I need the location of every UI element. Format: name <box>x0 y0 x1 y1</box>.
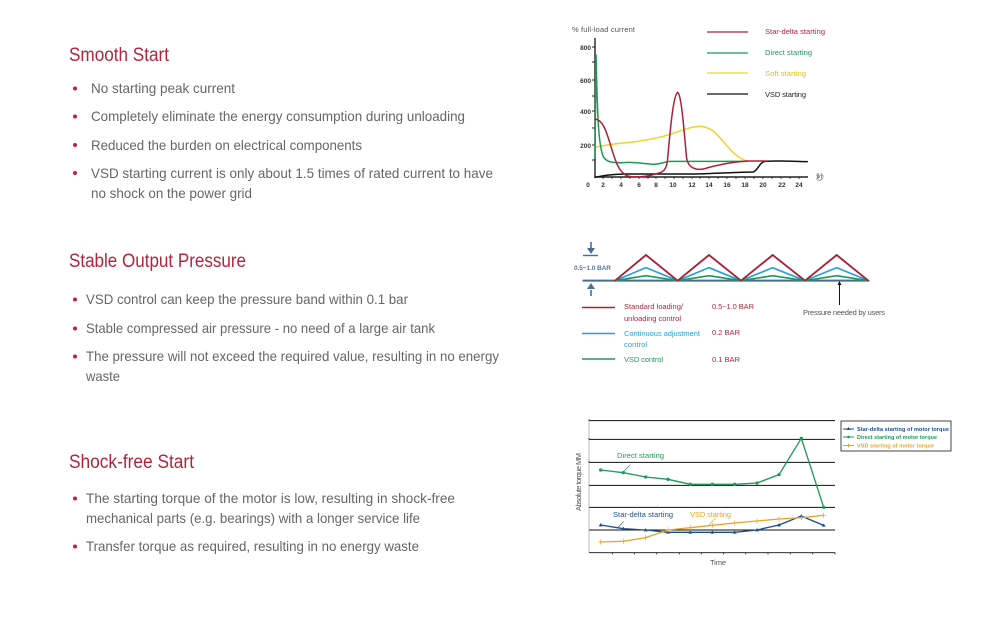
x axis labels: 4 <box>619 182 623 189</box>
y axis labels: 200 <box>580 143 591 150</box>
axis title: percent full-load current: % full-load current <box>572 25 636 34</box>
legend <box>707 27 825 99</box>
axes and ticks <box>592 38 808 179</box>
legend: Direct starting <box>765 48 812 57</box>
bullet list: shock-free start <box>73 490 455 554</box>
heading: stable output pressure: Stable Output Pressure <box>69 251 246 272</box>
legend: standard control <box>582 302 755 323</box>
bullet list: stable output pressure <box>73 291 499 384</box>
x axis labels: 10 <box>669 182 677 189</box>
series lines <box>598 437 826 544</box>
range label: 0.5~1.0 BAR <box>574 265 611 272</box>
x axis labels: 16 <box>723 182 731 189</box>
bullet list: stable output pressure: waste <box>85 368 120 384</box>
legend: standard control: 0.5~1.0 BAR <box>712 302 755 311</box>
x axis unit: 秒 <box>816 172 824 182</box>
x axis labels: 18 <box>741 182 749 189</box>
label: star-delta starting: Star-delta starting <box>613 510 673 519</box>
pressure waves <box>583 255 868 281</box>
bullet list: smooth start: VSD starting current is only about 1.5 times of rated current to have <box>91 165 493 181</box>
heading: smooth start: Smooth Start <box>69 45 170 66</box>
x axis title: Time <box>710 558 726 567</box>
x axis labels: 12 <box>688 182 696 189</box>
x axis labels: 22 <box>778 182 786 189</box>
legend: Star-delta starting <box>765 27 825 36</box>
arrow: band top <box>583 242 598 256</box>
x axis labels: 8 <box>654 182 658 189</box>
bullet list: smooth start: Completely eliminate the energy consumption during unloading <box>91 108 465 124</box>
legend: continuous adjustment <box>582 328 741 349</box>
label: direct starting: Direct starting <box>617 451 664 460</box>
chart: starting current line chart <box>572 25 825 189</box>
bullet list: stable output pressure: VSD control can keep the pressure band within 0.1 bar <box>86 291 408 307</box>
legend: standard control: unloading control <box>624 314 681 323</box>
bullet list: smooth start: No starting peak current <box>91 80 235 96</box>
bullet list: smooth start: Reduced the burden on electrical components <box>91 137 362 153</box>
legend box: Star-delta starting of motor torque <box>857 427 949 433</box>
legend: VSD control: VSD control <box>624 355 663 364</box>
x axis labels: 6 <box>637 182 641 189</box>
bullet list: stable output pressure: Stable compressed air pressure - no need of a large air tank <box>86 320 436 336</box>
panel: shock-free start text <box>69 452 455 554</box>
grid and axes <box>589 419 835 554</box>
bullet list: shock-free start: Transfer torque as required, resulting in no energy waste <box>86 538 419 554</box>
y axis labels: 400 <box>580 109 591 116</box>
legend: VSD starting <box>765 90 806 99</box>
panel: smooth start text <box>69 45 493 201</box>
legend: Soft starting <box>765 69 806 78</box>
heading: shock-free start: Shock-free Start <box>69 452 195 473</box>
curves <box>595 55 807 177</box>
x axis labels: 24 <box>795 182 803 189</box>
legend box: Direct starting of motor torque <box>857 435 937 441</box>
legend box <box>841 421 951 451</box>
y axis labels <box>580 45 591 150</box>
y axis labels: 600 <box>580 78 591 85</box>
bullet list: shock-free start: The starting torque of the motor is low, resulting in shock-free <box>86 490 455 506</box>
callout: pressure needed by users: Pressure needed by users <box>803 308 885 317</box>
y axis labels: 800 <box>580 45 591 52</box>
x axis labels <box>586 182 803 189</box>
chart: pressure band diagram <box>574 242 885 364</box>
chart: motor torque line chart <box>574 419 951 567</box>
legend: VSD control: 0.1 BAR <box>712 355 741 364</box>
arrow: band bottom <box>587 283 595 296</box>
x axis labels: 2 <box>601 182 605 189</box>
bullet list: shock-free start: mechanical parts (e.g. bearings) with a longer service life <box>86 510 420 526</box>
legend: continuous adjustment: Continuous adjustment <box>624 329 701 338</box>
x axis labels: 20 <box>759 182 767 189</box>
label: VSD starting: VSD starting <box>690 510 731 519</box>
bullet list: smooth start <box>73 80 493 201</box>
x axis labels: 14 <box>705 182 713 189</box>
legend: continuous adjustment: 0.2 BAR <box>712 328 741 337</box>
arrow: pressure needed <box>838 281 842 305</box>
legend: VSD control <box>582 355 741 364</box>
panel: stable output pressure text <box>69 251 499 384</box>
legend: continuous adjustment: control <box>624 340 647 349</box>
bullet list: smooth start: no shock on the power grid <box>91 185 252 201</box>
bullet list: stable output pressure: The pressure will not exceed the required value, resulting in no energy <box>86 348 499 364</box>
legend box: VSD starting of motor torque <box>857 444 934 450</box>
y axis title: Absolute torque MM <box>574 453 583 511</box>
legend: standard control: Standard loading/ <box>624 302 684 311</box>
x axis labels: 0 <box>586 182 590 189</box>
